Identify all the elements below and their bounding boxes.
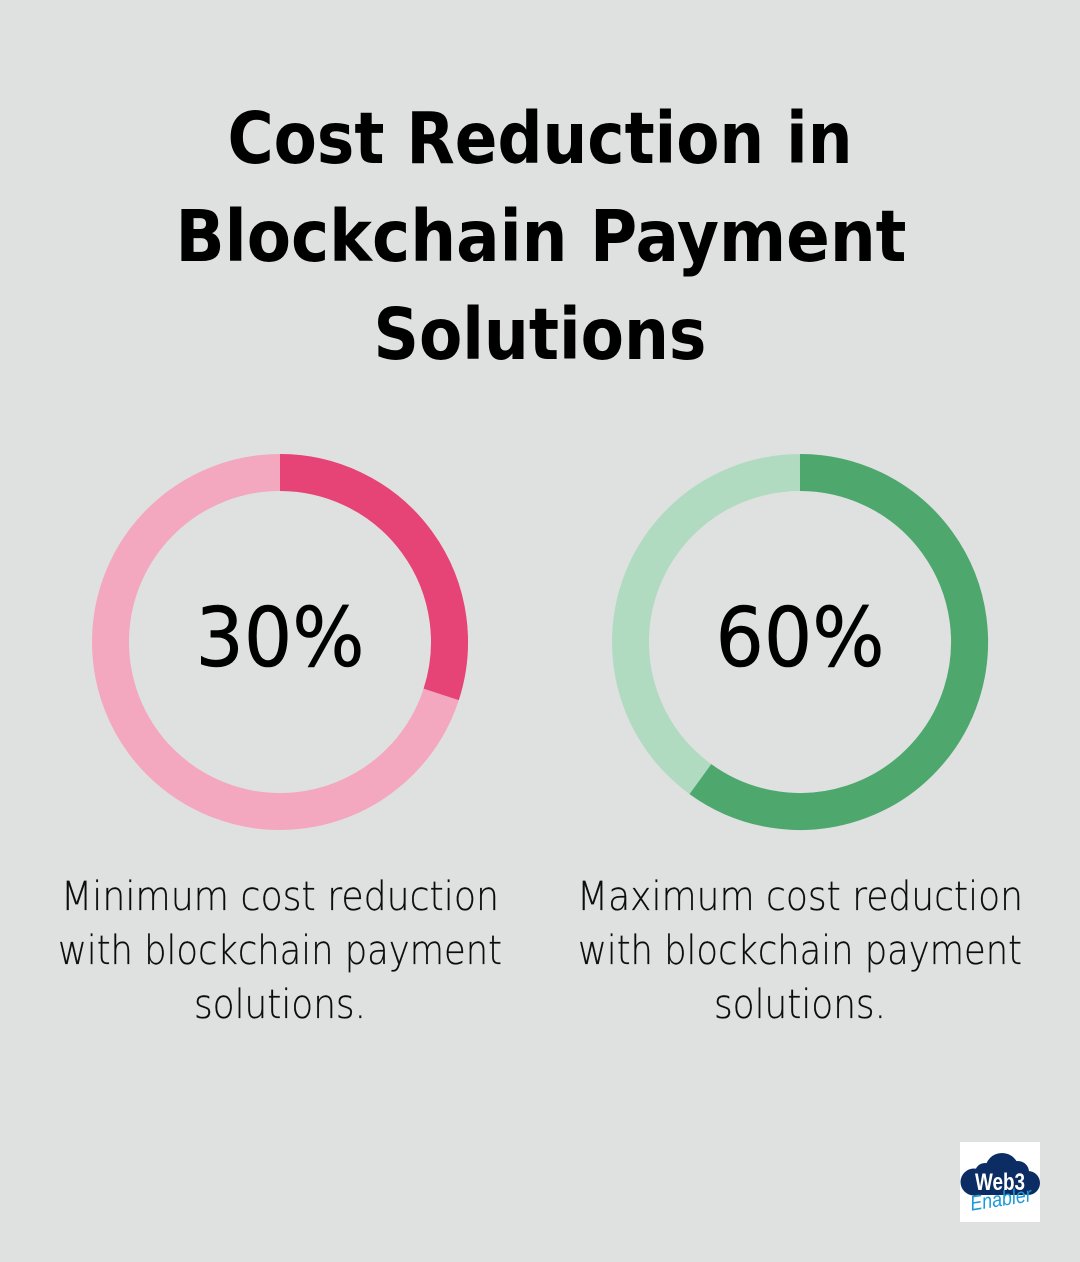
title — [176, 97, 906, 376]
caption: minimum: solutions. — [194, 982, 366, 1028]
panel: maximum cost reduction — [577, 472, 1023, 1028]
logo: Web3 Enabler: Web3 — [975, 1169, 1025, 1196]
logo: Web3 Enabler — [960, 1142, 1040, 1222]
donut chart: 60% — [630, 472, 970, 812]
donut chart: 30% — [110, 472, 450, 812]
title: Cost Reduction in — [228, 97, 852, 180]
caption: maximum: solutions. — [714, 982, 886, 1028]
title: Blockchain Payment — [176, 195, 906, 278]
caption: minimum: with blockchain payment — [58, 928, 502, 974]
value: 30%: 30% — [196, 591, 364, 686]
value: 60%: 60% — [716, 591, 884, 686]
caption: minimum: Minimum cost reduction — [61, 874, 499, 920]
caption: maximum — [577, 874, 1023, 1028]
title: Solutions — [374, 293, 706, 376]
caption: minimum — [58, 874, 502, 1028]
caption: maximum: with blockchain payment — [578, 928, 1022, 974]
panel: minimum cost reduction — [58, 472, 502, 1028]
logo: Web3 Enabler: Enabler — [969, 1183, 1034, 1216]
caption: maximum: Maximum cost reduction — [577, 874, 1023, 920]
